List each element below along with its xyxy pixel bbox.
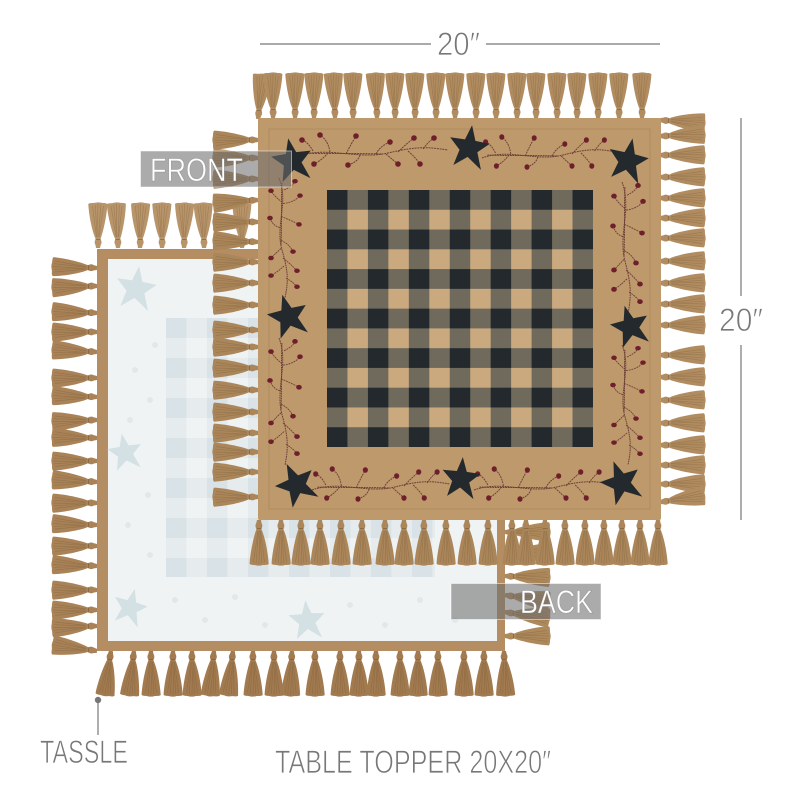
front label: FRONT — [150, 152, 243, 188]
back topper — [50, 202, 552, 698]
back label — [451, 584, 601, 620]
back panel border — [97, 249, 505, 651]
caption: TABLE TOPPER 20X20″ — [275, 744, 551, 780]
front bottom tassels — [250, 520, 668, 566]
width dimension line — [260, 43, 660, 45]
ghost gingham — [166, 318, 435, 577]
front top tassels — [248, 72, 651, 120]
ghost berries — [125, 342, 458, 628]
black stars — [263, 122, 654, 511]
back panel white fabric — [108, 259, 497, 641]
back left tassels — [50, 257, 98, 661]
berry vines — [267, 132, 646, 502]
front right tassels — [659, 110, 707, 511]
back bottom tassels — [95, 650, 515, 698]
tassel callout: TASSLE — [40, 734, 128, 770]
front left tassels — [212, 131, 259, 507]
gingham check — [327, 190, 593, 447]
ghost stars — [105, 263, 327, 640]
width label: 20″ — [437, 26, 480, 62]
height label: 20″ — [719, 302, 763, 338]
front panel — [258, 118, 661, 520]
front panel hem stitch — [269, 129, 650, 509]
front topper — [212, 72, 707, 566]
tassel callout — [40, 697, 128, 770]
height dimension line — [740, 118, 742, 520]
back right tassels — [504, 522, 552, 645]
back top tassels — [88, 202, 251, 248]
back label: BACK — [520, 584, 593, 620]
